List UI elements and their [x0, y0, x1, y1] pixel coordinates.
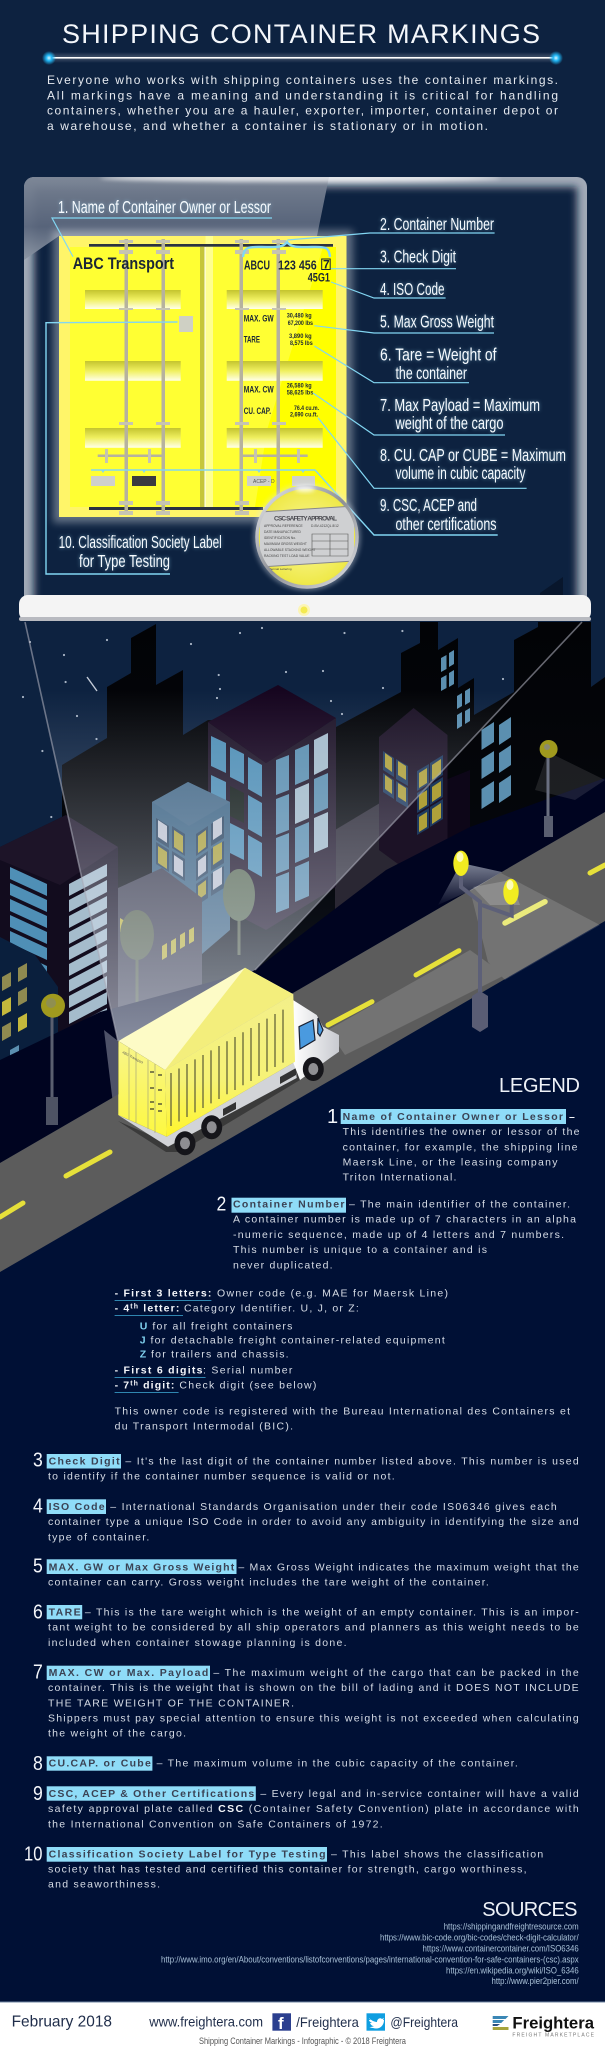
- legend item 9: – Every legal and in-service container will have a valid: [260, 1788, 579, 1800]
- legend item 6: – This is the tare weight which is the weight of an empty container. This is an impor-: [85, 1607, 579, 1619]
- monitor panel: [19, 174, 591, 621]
- legend item 2: A container number is made up of 7 characters in an alpha: [233, 1214, 576, 1226]
- magnifier showing CSC plate: MAXIMUM GROSS WEIGHT: [264, 542, 307, 546]
- monitor base bar: [19, 595, 591, 621]
- legend item 2: – The main identifier of the container.: [349, 1199, 570, 1211]
- legend item 2: never duplicated.: [233, 1259, 333, 1271]
- legend item 1: Triton International.: [343, 1172, 456, 1184]
- legend item 2: This number is unique to a container and is: [233, 1244, 487, 1256]
- label 7: weight of the cargo: [395, 413, 504, 433]
- legend item 6: [33, 1601, 579, 1649]
- legend item 1: 1: [327, 1106, 338, 1128]
- legend item 7: 7: [33, 1662, 43, 1684]
- container text: ABCU: [244, 257, 270, 272]
- truck light beam: [25, 622, 582, 1118]
- container text: 76.4 cu.m.: [294, 406, 319, 412]
- truck back face: ABC Transport: [122, 1050, 144, 1065]
- sidewalk: [0, 778, 605, 1163]
- footer website: www.freightera.com: [148, 2014, 263, 2030]
- legend item 5: container can carry. Gross weight includes the tare weight of the container.: [48, 1576, 489, 1588]
- sources list: https://shippingandfreightresource.com: [444, 1921, 579, 1931]
- truck: [118, 968, 339, 1155]
- container number breakdown: letter:: [139, 1303, 179, 1315]
- container text: 45G1: [308, 271, 330, 285]
- legend item 6: included when container stowage planning is done.: [48, 1637, 346, 1649]
- icon: facebook: f: [278, 2014, 284, 2033]
- legend item 7: the weight of the cargo.: [48, 1728, 186, 1740]
- label 6: 6. Tare = Weight of: [380, 345, 497, 365]
- container text: 2,690 cu.ft.: [290, 413, 318, 419]
- rod brackets: [105, 240, 300, 515]
- building: front gray with trees: [118, 868, 255, 1030]
- legend item 8: 8: [33, 1753, 43, 1775]
- leader lines: [46, 218, 527, 574]
- intro paragraph: a warehouse, and whether a container is stationary or in motion.: [47, 119, 488, 133]
- road lights: [328, 873, 600, 1055]
- magnifier showing CSC plate: APPROVAL REFERENCE: [264, 524, 303, 528]
- legend item 5: 5: [33, 1555, 43, 1577]
- label 10: 10. Classification Society Label: [59, 532, 222, 552]
- magnifier showing CSC plate: IDENTIFICATION No.: [264, 536, 296, 540]
- container number breakdown: digit:: [139, 1380, 174, 1392]
- label 7: [380, 395, 540, 433]
- container text: 26,580 kg: [287, 384, 312, 390]
- label 3: 3. Check Digit: [380, 247, 456, 267]
- label 5: 5. Max Gross Weight: [380, 311, 494, 331]
- legend heading: LEGEND: [499, 1075, 580, 1097]
- magnifier showing CSC plate: RACKING TEST LOAD VALUE: [264, 554, 310, 558]
- container number breakdown: [115, 1288, 570, 1432]
- container text: 123 456: [278, 257, 317, 272]
- container number breakdown: Owner code (e.g. MAE for Maersk Line): [217, 1288, 448, 1300]
- callout labels: [58, 197, 566, 571]
- legend item 10: 10: [24, 1844, 42, 1866]
- legend item 3: Check Digit: [49, 1456, 120, 1468]
- building: dark blue far left: [0, 937, 58, 1095]
- container number breakdown: Category Identifier. U, J, or Z:: [184, 1303, 359, 1315]
- intro paragraph: Everyone who works with shipping containers uses the container markings.: [47, 73, 558, 87]
- icon: facebook: [272, 2013, 291, 2033]
- container number breakdown: Z: [140, 1348, 147, 1360]
- legend item 2: Container Number: [233, 1199, 344, 1211]
- logo: Freightera: [493, 2013, 595, 2039]
- container text: ABC Transport: [73, 255, 174, 273]
- sources list: https://www.containercontainer.com/ISO6346: [422, 1943, 579, 1953]
- intro paragraph: [47, 73, 558, 133]
- container text: 67,200 lbs: [288, 321, 314, 327]
- truck roof: [118, 968, 293, 1070]
- legend item 4: [33, 1495, 579, 1543]
- legend item 6: TARE: [49, 1607, 81, 1619]
- container number breakdown: This owner code is registered with the Bureau International des Containers et: [115, 1405, 570, 1417]
- magnifier showing CSC plate: CSC SAFETY APPROVAL: [274, 516, 337, 523]
- label 4: 4. ISO Code: [380, 279, 444, 299]
- legend item 9: [33, 1783, 579, 1830]
- legend item 1: This identifies the owner or lessor of the: [343, 1126, 580, 1138]
- container number breakdown: - 7: [115, 1380, 129, 1392]
- label plates: [91, 316, 315, 486]
- magnifier showing CSC plate: Thermal Lettering: [268, 567, 292, 571]
- intro paragraph: containers, whether you are a hauler, exporter, importer, container depot or: [47, 104, 558, 118]
- building: right low dark: [413, 770, 470, 900]
- label 1: 1. Name of Container Owner or Lessor: [58, 197, 271, 217]
- footer: [0, 2002, 605, 2048]
- truck back face: [118, 1041, 167, 1137]
- legend item 3: to identify if the container number sequence is valid or not.: [48, 1471, 395, 1483]
- footer date: February 2018: [12, 2014, 112, 2031]
- legend item 1: –: [569, 1111, 575, 1123]
- intro paragraph: All markings have a meaning and understanding it is critical for handling: [47, 88, 558, 102]
- legend item 7: MAX. CW or Max. Payload: [49, 1667, 208, 1679]
- legend item 9: 9: [33, 1783, 43, 1805]
- container text: 3,890 kg: [289, 334, 312, 340]
- container number breakdown: :: [203, 1365, 206, 1377]
- truck side: [165, 994, 295, 1137]
- icon: twitter: [366, 2013, 385, 2031]
- legend item 7: [33, 1662, 579, 1740]
- legend item 3: 3: [33, 1450, 43, 1472]
- container number breakdown: Check digit (see below): [179, 1380, 316, 1392]
- legend item 7: THE TARE WEIGHT OF THE CONTAINER.: [48, 1697, 294, 1709]
- skyline silhouette: [62, 622, 605, 1100]
- legend item 3: [33, 1450, 579, 1483]
- container number breakdown: - First 6 digits: [115, 1365, 203, 1377]
- truck chassis: [118, 1062, 297, 1147]
- legend item 7: Shippers must pay special attention to ensure this weight is not exceeded when calculating: [48, 1712, 579, 1724]
- label 9: other certifications: [396, 514, 497, 534]
- road dashes: [0, 865, 605, 1217]
- legend item 8: CU.CAP. or Cube: [49, 1758, 151, 1770]
- legend item 1: Maersk Line, or the leasing company: [343, 1157, 558, 1169]
- container text: 7: [323, 257, 330, 271]
- label 8: volume in cubic capacity: [396, 463, 526, 483]
- legend item 4: 4: [33, 1495, 43, 1517]
- container number breakdown: for all freight containers: [152, 1320, 292, 1332]
- twitter handle: @Freightera: [390, 2014, 458, 2030]
- magnifier showing CSC plate: DATE MANUFACTURED: [264, 530, 302, 534]
- street lamp: double: [438, 851, 520, 1032]
- logo: Freightera: Freightera: [512, 2013, 595, 2032]
- legend item 4: – International Standards Organisation under their code IS06346 gives each: [110, 1501, 557, 1513]
- monitor frame: [24, 174, 587, 617]
- container number breakdown: th: [130, 1381, 138, 1388]
- container text: CU. CAP.: [244, 406, 271, 416]
- legend item 9: the International Convention on Safe Containers of 1972.: [48, 1818, 383, 1830]
- truck cab: [293, 1000, 339, 1080]
- legend item 6: tant weight to be considered by all ship operators and planners as this weight needs to be: [48, 1622, 579, 1634]
- container number breakdown: for trailers and chassis.: [151, 1348, 289, 1360]
- legend item 8: – The maximum volume in the cubic capacity of the container.: [157, 1758, 518, 1770]
- grille blocks: [223, 1068, 296, 1116]
- sources list: https://www.bic-code.org/bic-codes/check-digit-calculator/: [380, 1932, 579, 1942]
- truck ribs: [171, 1010, 283, 1126]
- container text: MAX. CW: [244, 385, 274, 395]
- skyline windows: [441, 650, 511, 809]
- sources list: https://en.wikipedia.org/wiki/ISO_6346: [446, 1965, 579, 1975]
- legend item 9: CSC, ACEP & Other Certifications: [49, 1788, 254, 1800]
- stars: [23, 628, 503, 817]
- label 2: 2. Container Number: [380, 214, 494, 234]
- magnifier showing CSC plate: ALLOWABLE STACKING WEIGHT: [264, 548, 315, 552]
- legend item 5: – Max Gross Weight indicates the maximum weight that the: [238, 1561, 579, 1573]
- label plates: ACEP - D: [253, 479, 275, 485]
- label 10: [59, 532, 222, 571]
- building: small blue: [152, 782, 230, 960]
- label 6: the container: [396, 363, 467, 383]
- legend item 5: MAX. GW or Max Gross Weight: [49, 1561, 235, 1573]
- legend item 7: container. This is the weight that is shown on the bill of lading and it DOES NOT INCLUDE: [48, 1682, 579, 1694]
- label 10: for Type Testing: [79, 551, 170, 571]
- shooting star: [87, 677, 97, 691]
- building: small purple right: [379, 708, 448, 875]
- label 7: 7. Max Payload = Maximum: [380, 395, 540, 415]
- legend item 10: Classification Society Label for Type Testing: [49, 1848, 326, 1860]
- container text: 8,575 lbs: [290, 341, 313, 347]
- legend item 2: [216, 1194, 576, 1271]
- street lamp: left: [41, 994, 65, 1125]
- label 6: [380, 345, 497, 383]
- sources list: [161, 1921, 579, 1986]
- legend item 10: society that has tested and certified this container for strength, cargo worthiness,: [48, 1864, 527, 1876]
- legend item 4: type of container.: [48, 1531, 149, 1543]
- container text: MAX. GW: [244, 314, 274, 324]
- magnifier showing CSC plate: D-BV-4212QL 8/12: [311, 524, 339, 528]
- door rods: [98, 239, 308, 515]
- legend item 5: [33, 1555, 579, 1588]
- container number breakdown: for detachable freight container-related equipment: [150, 1334, 445, 1346]
- container text: TARE: [244, 334, 260, 344]
- container number breakdown: du Transport Intermodal (BIC).: [115, 1420, 293, 1432]
- title: SHIPPING CONTAINER MARKINGS: [62, 19, 540, 49]
- recess panels: [85, 290, 181, 309]
- legend item 1: Name of Container Owner or Lessor: [343, 1111, 563, 1123]
- building: left purple with stripes: [0, 815, 118, 1100]
- sources list: http://www.pier2pier.com/: [492, 1976, 579, 1986]
- building: gray mid: [335, 800, 413, 930]
- legend item 1: [327, 1106, 580, 1184]
- container number breakdown: - First 3 letters:: [115, 1288, 211, 1300]
- legend item 4: ISO Code: [49, 1501, 105, 1513]
- footer copyright: Shipping Container Markings - Infographic - © 2018 Freightera: [199, 2036, 406, 2046]
- logo: Freightera: FREIGHT MARKETPLACE: [512, 2033, 595, 2039]
- legend item 4: container type a unique ISO Code in order to avoid any ambiguity in identifying the size and: [48, 1516, 579, 1528]
- legend item 8: [33, 1753, 518, 1775]
- title divider with glowing dots: [42, 51, 563, 65]
- legend item 7: – The maximum weight of the cargo that can be packed in the: [213, 1667, 579, 1679]
- container number breakdown: th: [130, 1304, 138, 1311]
- legend item 2: -numeric sequence, made up of 4 letters and 7 numbers.: [233, 1229, 564, 1241]
- legend item 10: [24, 1844, 543, 1891]
- night city scene: [0, 622, 605, 1272]
- label 9: 9. CSC, ACEP and: [380, 495, 477, 515]
- magnifier showing CSC plate: [253, 483, 361, 591]
- container number breakdown: J: [140, 1334, 146, 1346]
- lit road dash: [505, 902, 545, 923]
- truck cab windows: [299, 1018, 323, 1049]
- facebook handle: /Freightera: [296, 2014, 359, 2030]
- street lamp: upper right: [535, 740, 605, 837]
- container number breakdown: Serial number: [211, 1365, 293, 1377]
- legend item 6: 6: [33, 1601, 43, 1623]
- building: tall purple: [208, 685, 336, 930]
- container text: 58,625 lbs: [287, 391, 314, 397]
- label 9: [380, 495, 497, 534]
- container illustration: [59, 236, 346, 517]
- legend item 1: container, for example, the shipping line: [343, 1141, 578, 1153]
- road: [0, 812, 605, 1272]
- container text: 30,480 kg: [287, 314, 312, 320]
- container text: [73, 255, 330, 419]
- legend item 10: – This label shows the classification: [331, 1848, 543, 1860]
- legend item 3: – It's the last digit of the container number listed above. This number is used: [125, 1456, 579, 1468]
- sources heading: SOURCES: [482, 1899, 578, 1921]
- label 8: [380, 445, 566, 483]
- container number breakdown: - 4: [115, 1303, 129, 1315]
- legend item 2: 2: [216, 1194, 226, 1216]
- truck wheels: [174, 1057, 324, 1155]
- legend item 9: safety approval plate called CSC (Container Safety Convention) plate in accordance with: [48, 1803, 579, 1815]
- container number breakdown: U: [140, 1320, 147, 1332]
- legend item 10: and seaworthiness.: [48, 1879, 160, 1891]
